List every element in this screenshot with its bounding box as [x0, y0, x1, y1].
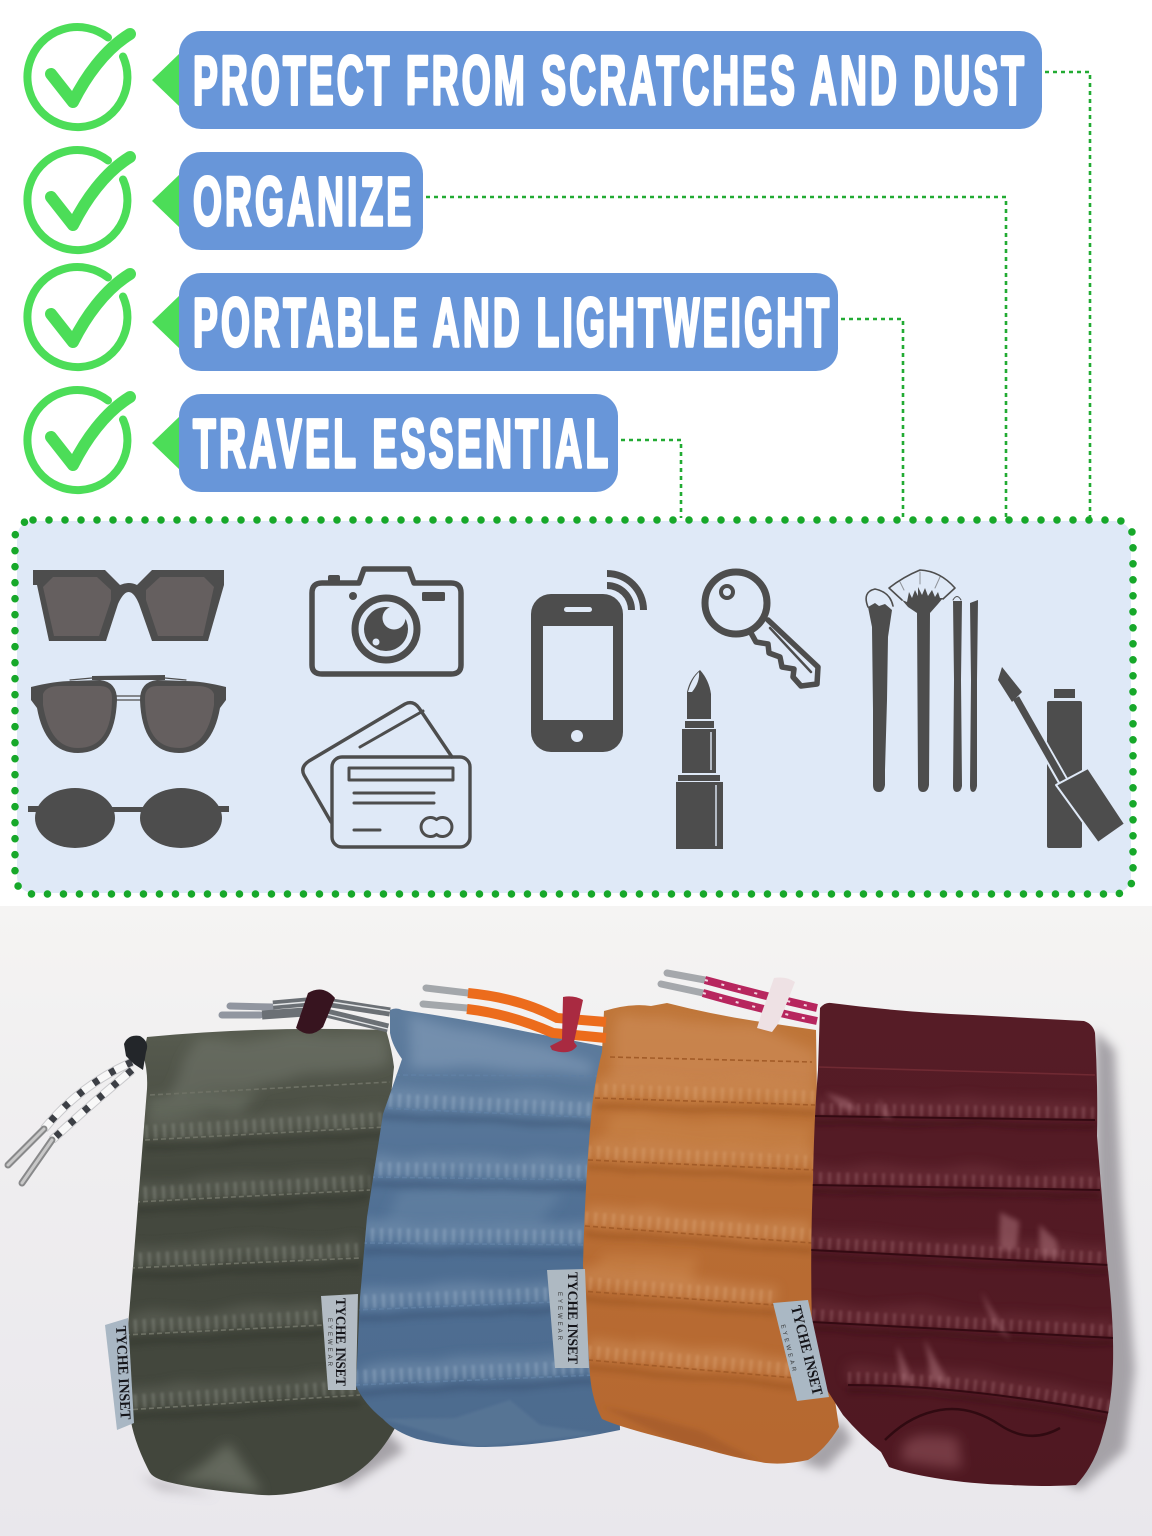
- icon: key: [705, 572, 818, 686]
- blue pouch: [355, 1008, 620, 1447]
- icon: makeup brushes: [866, 570, 978, 792]
- label tag on orange pouch: EYEWEAR: [779, 1324, 797, 1375]
- icon: green check mark: [27, 150, 130, 250]
- photo backdrop: [0, 906, 1152, 1536]
- icon: green check mark: [27, 390, 130, 490]
- label pill: [179, 31, 1042, 129]
- icon: credit cards: [303, 703, 470, 847]
- drawstring: grey laces and dark slider: [222, 989, 390, 1034]
- quilting: [355, 1015, 605, 1447]
- connector: travel to panel: [621, 440, 681, 518]
- icon: camera: [312, 569, 461, 674]
- pointer triangle: [152, 416, 180, 470]
- quilting: [125, 1034, 390, 1492]
- green pouch: [125, 1029, 395, 1495]
- icon: green check mark: [27, 27, 130, 127]
- label tag on green pouch, right: EYEWEAR: [326, 1318, 332, 1369]
- panel: items that fit in the pouch: [15, 520, 1133, 894]
- label text: TRAVEL ESSENTIAL: [193, 405, 608, 482]
- icon: aviator bridge sunglasses: [31, 675, 226, 753]
- pointer triangle: [152, 53, 180, 107]
- benefit row: protect from scratches and dust: [27, 27, 1042, 129]
- connector: portable to panel: [841, 319, 903, 518]
- pointer triangle: [152, 295, 180, 349]
- label pill: [179, 273, 838, 371]
- label pill: [179, 152, 423, 250]
- quilting: [810, 1067, 1114, 1470]
- icon: lip gloss: [998, 667, 1125, 848]
- product photo: four quilted pouches: [0, 906, 1152, 1536]
- orange pouch: [580, 1003, 839, 1464]
- icon: round sunglasses: [28, 788, 229, 848]
- label text: PORTABLE AND LIGHTWEIGHT: [193, 284, 829, 361]
- cast shadows: [140, 1030, 1135, 1495]
- benefit row: travel essential: [27, 390, 618, 492]
- label tag on green pouch, right: [321, 1294, 358, 1390]
- connector: protect to panel: [1045, 72, 1090, 518]
- label tag on green pouch, left: [105, 1318, 134, 1430]
- benefit row: portable and lightweight: [27, 267, 838, 371]
- pouch body: [583, 1003, 839, 1464]
- maroon pouch: [810, 1003, 1114, 1486]
- page background: [0, 0, 1152, 906]
- label tag on green pouch, right: TYCHE INSET: [332, 1298, 348, 1386]
- drawstring: orange cord and red slider: [423, 988, 606, 1052]
- icon: green check mark: [27, 267, 130, 367]
- label tag on orange pouch: TYCHE INSET: [787, 1304, 825, 1397]
- pouch body: [811, 1003, 1113, 1486]
- label text: ORGANIZE: [193, 163, 411, 240]
- label tag on green pouch, left: TYCHE INSET: [112, 1325, 133, 1420]
- icon: square sunglasses: [33, 570, 224, 641]
- label pill: [179, 394, 618, 492]
- quilting: [580, 1015, 815, 1462]
- label tag on blue pouch: [547, 1269, 589, 1368]
- drawstring: white patterned cord and black slider: [8, 1036, 147, 1183]
- label tag on blue pouch: TYCHE INSET: [564, 1272, 580, 1364]
- label tag on blue pouch: EYEWEAR: [556, 1292, 562, 1343]
- benefit row: organize: [27, 150, 423, 250]
- pointer triangle: [152, 174, 180, 228]
- panel background with dotted border: [15, 520, 1133, 894]
- pouch body: [356, 1008, 620, 1447]
- label tag on orange pouch: [773, 1300, 829, 1401]
- pouch body: [127, 1029, 395, 1495]
- icon: smartphone: [531, 570, 647, 752]
- label text: PROTECT FROM SCRATCHES AND DUST: [193, 42, 1024, 119]
- icon: lipstick: [676, 670, 723, 849]
- connector: organize to panel: [426, 197, 1006, 518]
- drawstring: pink cord and clear slider: [661, 973, 817, 1032]
